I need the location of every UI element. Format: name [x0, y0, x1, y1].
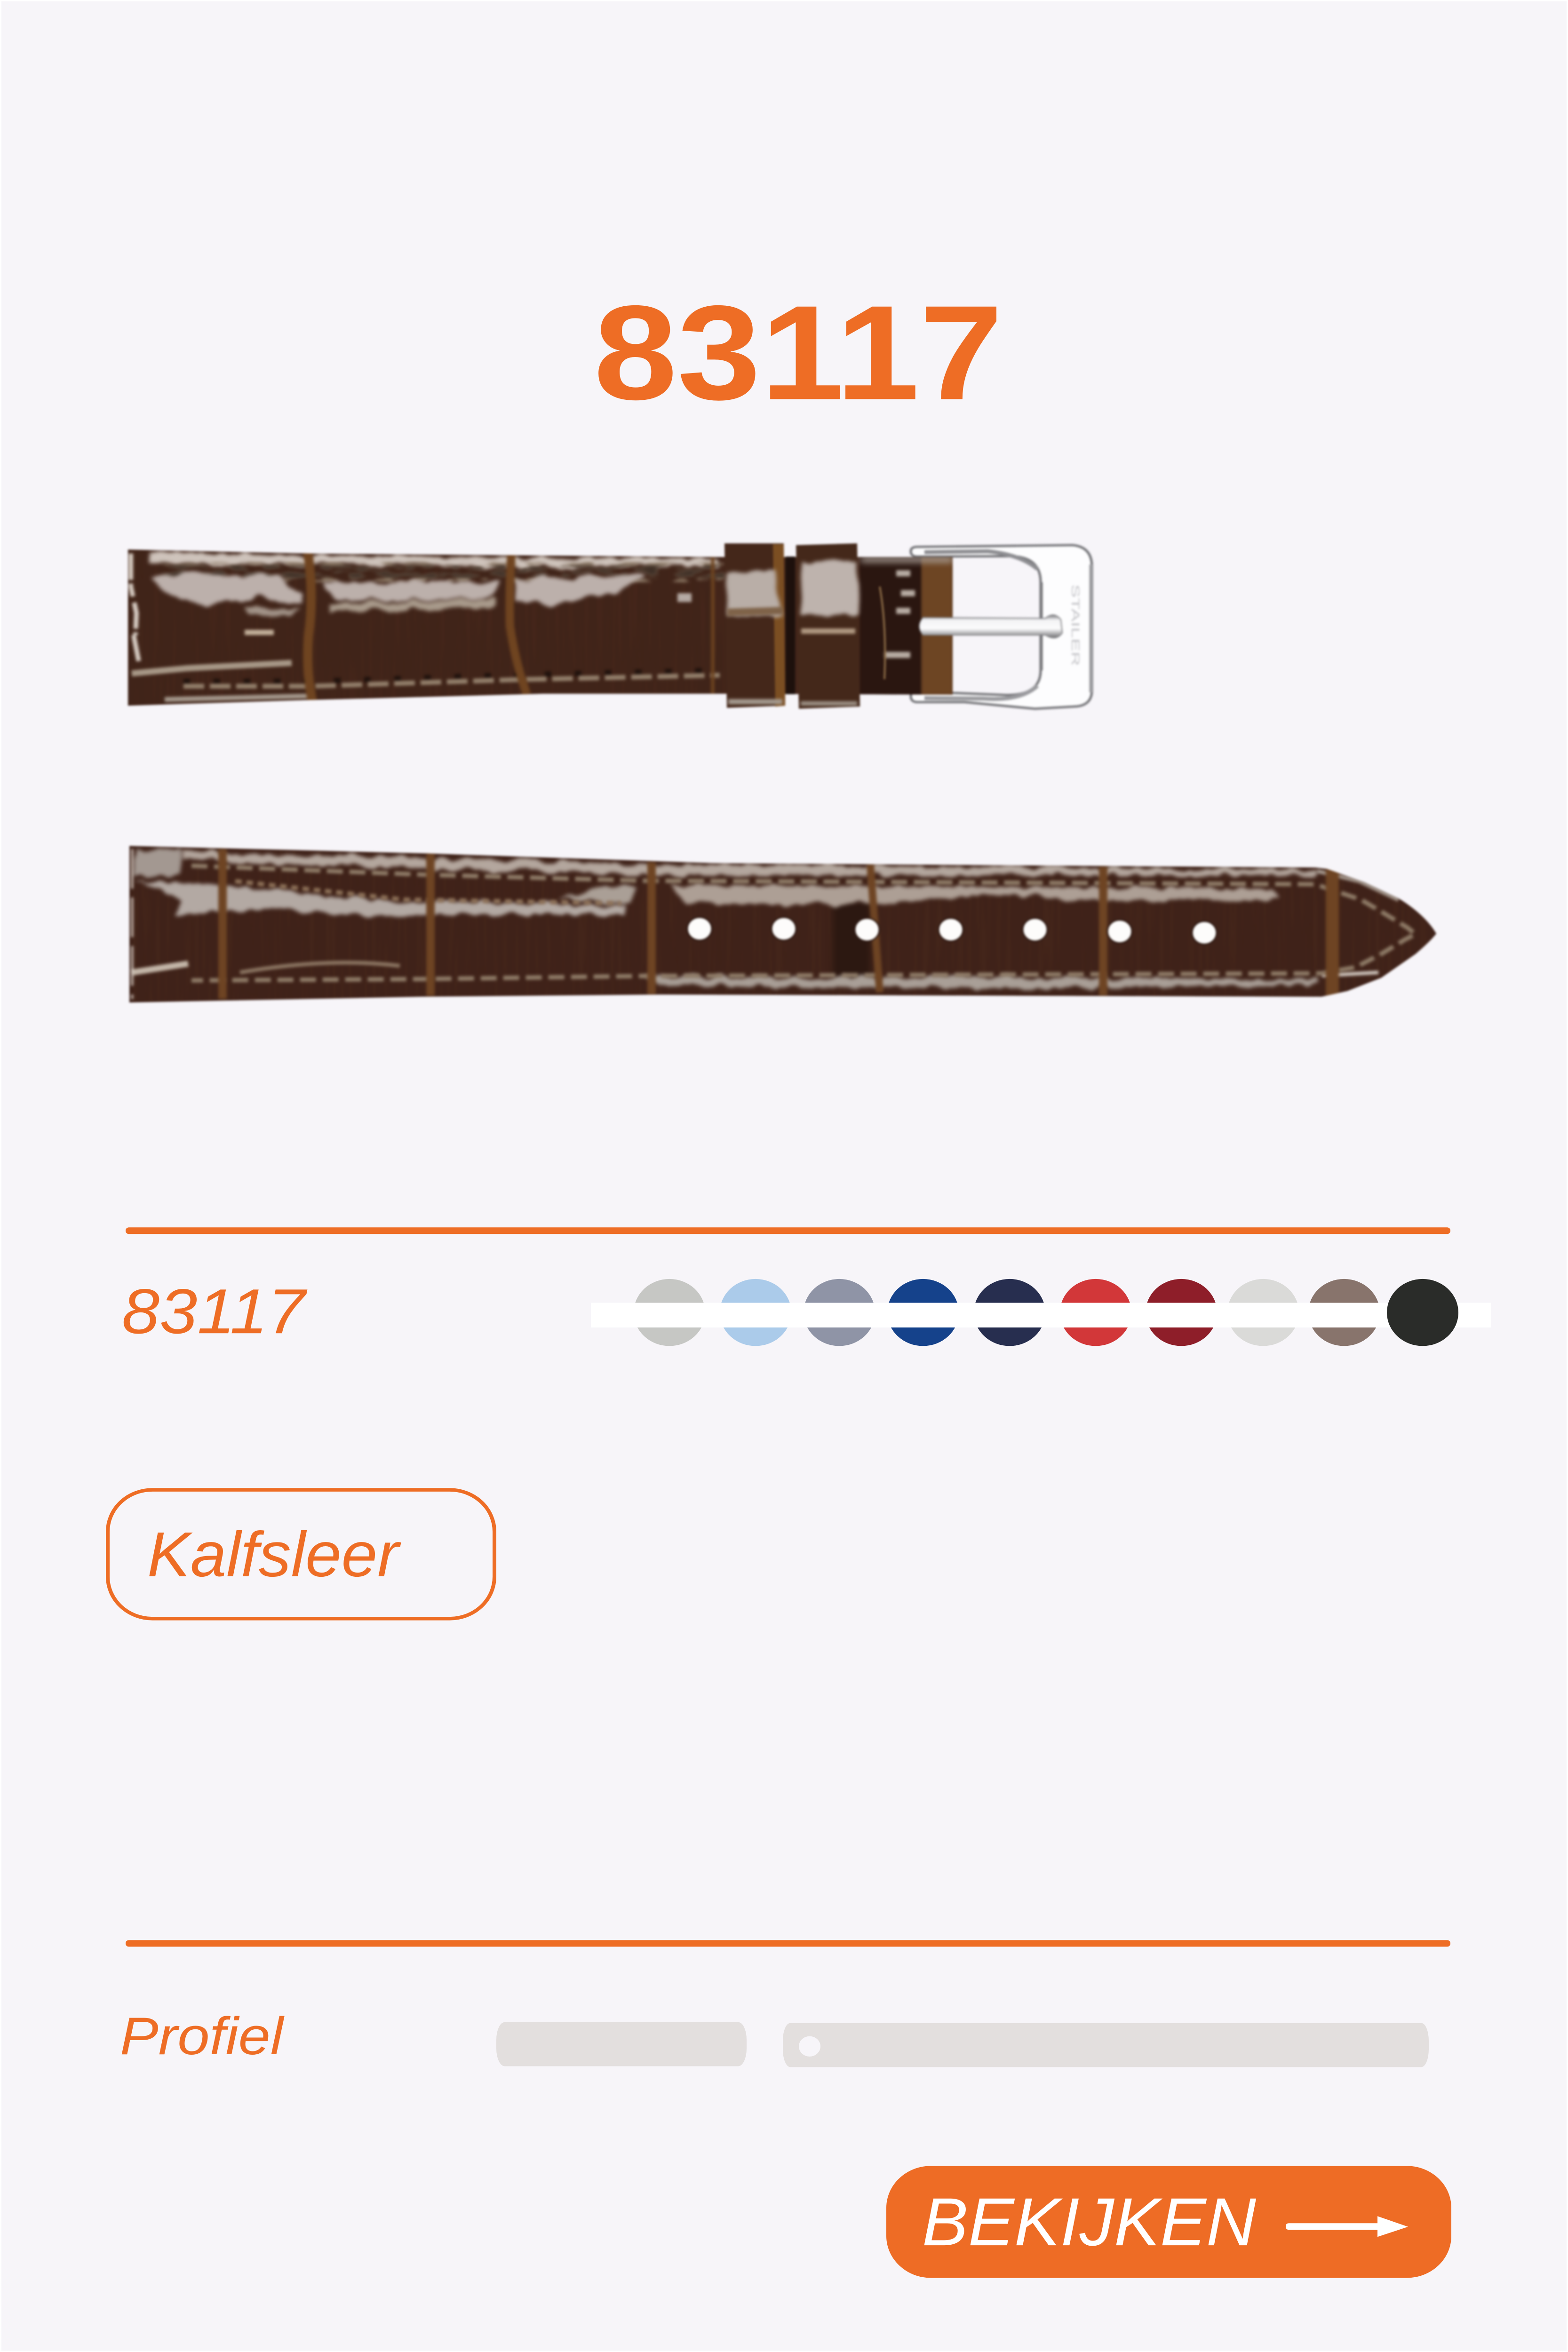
colour swatches — [591, 1279, 1491, 1346]
buckle engraving: STAILER — [1069, 584, 1082, 666]
button — [886, 2166, 1451, 2278]
material tag — [108, 1490, 494, 1619]
gap between loops — [786, 556, 795, 694]
lower strap stitches — [191, 866, 1416, 980]
profile label: Profiel — [120, 2007, 285, 2066]
upper strap highlights — [151, 572, 645, 614]
divider rule — [126, 1940, 1450, 1947]
keeper loop 2 — [796, 543, 860, 709]
model number: 83117 — [122, 1276, 308, 1347]
divider rule — [126, 1227, 1450, 1234]
upper strap creases — [308, 551, 713, 701]
arrow — [1286, 2216, 1408, 2237]
swatch circles — [634, 1279, 1380, 1346]
white band — [591, 1303, 1491, 1327]
lower strap leather — [129, 846, 1436, 1002]
profile dot — [799, 2036, 820, 2057]
profile bar 2 — [783, 2023, 1429, 2067]
profile bar 1 — [496, 2022, 747, 2066]
illustration: lower strap with holes — [129, 846, 1437, 1005]
keeper loop 1 — [724, 543, 795, 708]
profile diagram — [496, 2022, 1429, 2067]
tag label: Kalfsleer — [147, 1519, 401, 1590]
lower strap highlights — [129, 846, 1437, 1005]
upper strap leather — [128, 549, 956, 708]
buckle pin — [919, 615, 1062, 638]
illustration: upper strap with buckle — [128, 543, 1092, 709]
black swatch — [1387, 1279, 1458, 1346]
title: 83117 — [594, 277, 1003, 428]
button label: BEKIJKEN — [922, 2184, 1256, 2260]
button background — [886, 2166, 1451, 2278]
upper strap stitches — [183, 670, 720, 686]
lower strap creases — [223, 849, 1332, 999]
tag outline — [108, 1490, 494, 1619]
strap holes — [687, 917, 1217, 944]
buckle frame — [911, 545, 1092, 709]
left edge glint — [131, 554, 139, 661]
